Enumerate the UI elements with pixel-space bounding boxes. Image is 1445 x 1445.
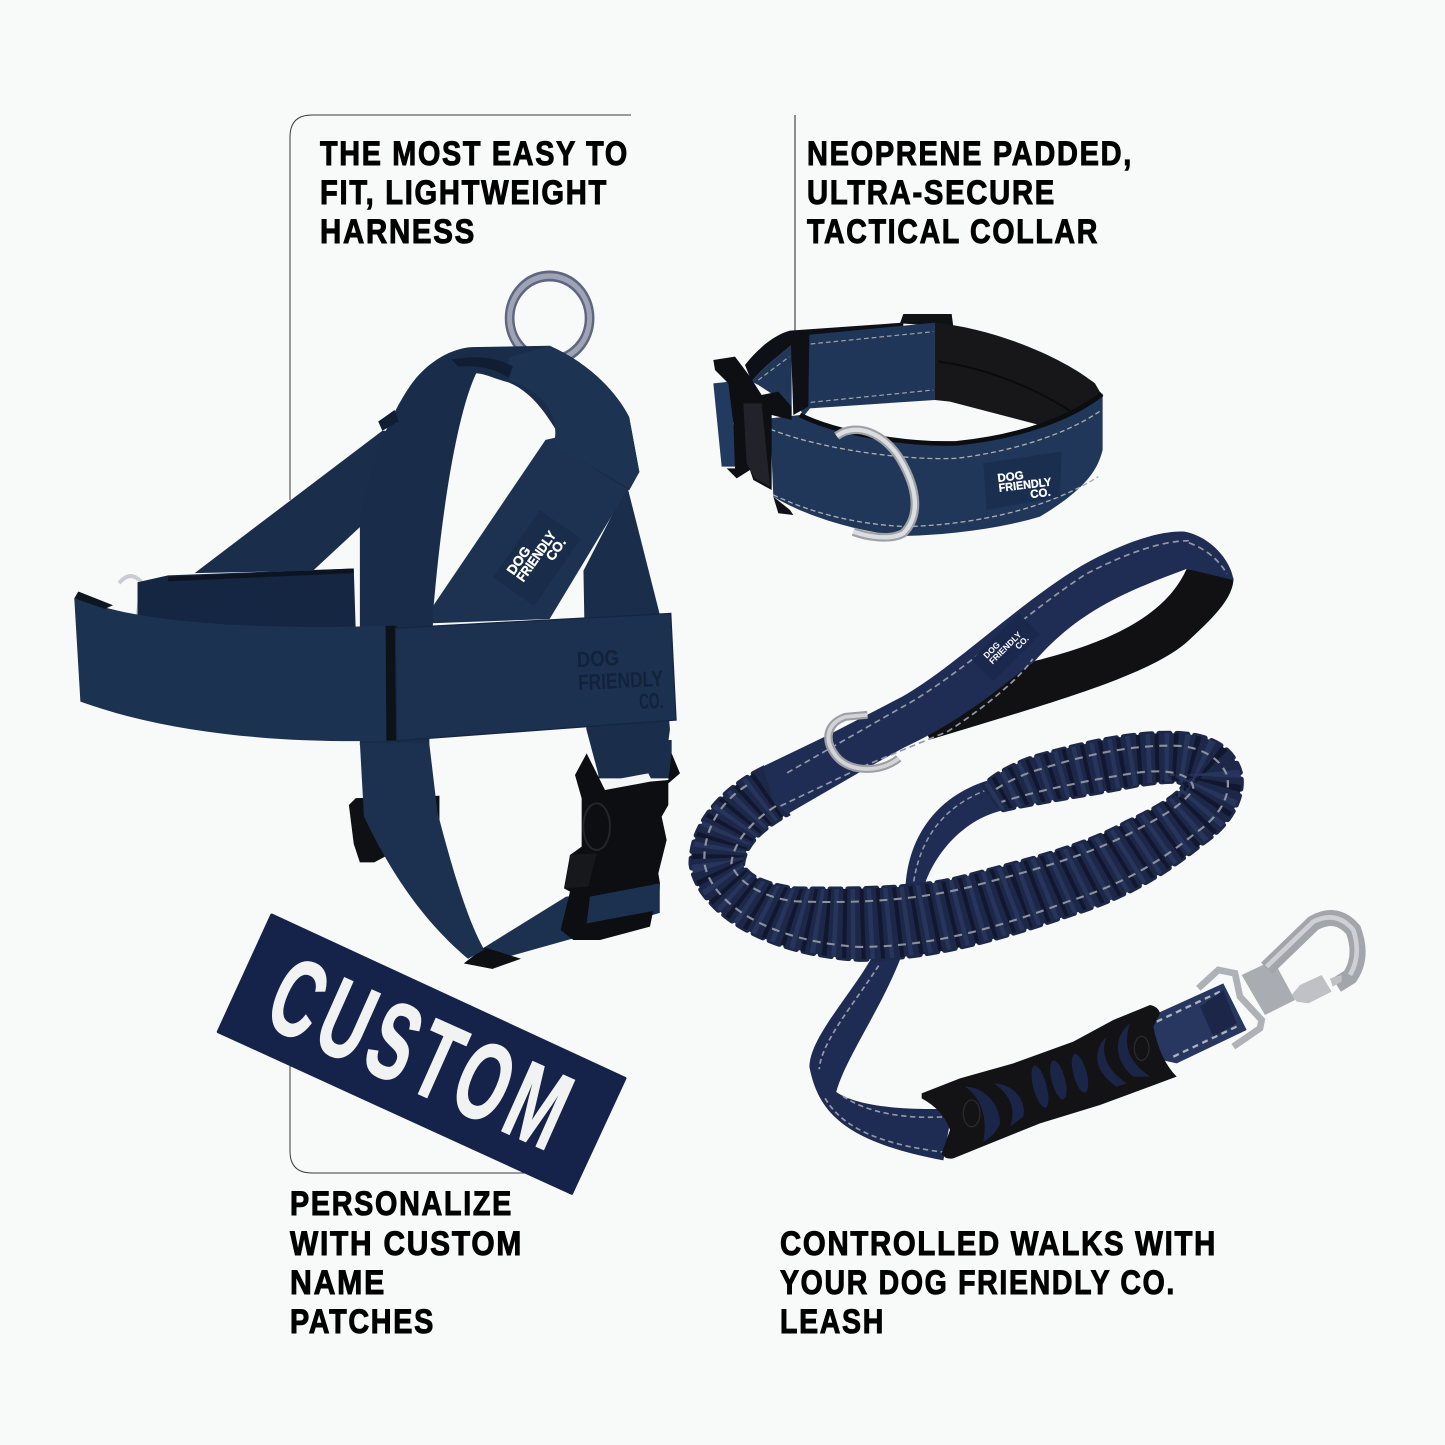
heading: patches: WITH CUSTOM: [290, 1225, 523, 1263]
heading: leash: LEASH: [780, 1303, 885, 1341]
leash handle label: DOG: [981, 639, 1002, 660]
diagonal strap label: CO.: [543, 535, 569, 563]
leather logo: [576, 643, 665, 717]
heading: collar: NEOPRENE PADDED,: [807, 135, 1133, 173]
heading: collar: ULTRA-SECURE: [807, 174, 1056, 212]
diagonal strap label: DOG: [504, 544, 534, 577]
flat leash strap, upper: [905, 779, 1004, 889]
heading: patches: [290, 1185, 523, 1341]
leather patch: [395, 613, 676, 741]
diagonal strap: [421, 435, 631, 624]
icon: collar buckle: [713, 357, 792, 490]
heading: patches: PERSONALIZE: [290, 1185, 513, 1223]
heading: patches: NAME: [290, 1264, 386, 1302]
icon: swivel snap hook: [1147, 917, 1358, 1063]
icon: collar D-ring: [837, 430, 915, 537]
heading: harness: FIT, LIGHTWEIGHT: [320, 174, 608, 212]
collar illustration: [713, 314, 1103, 537]
leash handle label: CO.: [1013, 634, 1031, 651]
diagonal strap label: FRIENDLY: [514, 528, 559, 584]
leather logo: CO.: [638, 688, 664, 714]
neck arch strap: [360, 346, 639, 745]
leather logo: DOG: [576, 645, 619, 672]
heading: leash: [780, 1225, 1217, 1341]
leash handle strap: [763, 532, 1234, 814]
harness illustration: [74, 276, 680, 969]
leash end strap: [1147, 983, 1247, 1063]
snap hook arc: [1267, 917, 1358, 985]
icon: leash D-ring: [828, 715, 899, 769]
patch lettering: CUSTOM: [251, 933, 594, 1176]
waist band front: [74, 591, 397, 741]
leather logo: FRIENDLY: [577, 666, 664, 695]
collar label text: DOG: [997, 470, 1024, 485]
inner waist band: [119, 568, 356, 633]
heading: harness: [320, 135, 629, 251]
snap body: [1242, 960, 1295, 1015]
bungee section: [691, 733, 1241, 959]
swivel ring: [1198, 970, 1262, 1047]
collar front band: [770, 393, 1103, 536]
leash illustration: [691, 532, 1358, 1160]
snap gate: [1292, 975, 1342, 1003]
flat leash strap, lower: [809, 957, 952, 1160]
heading: collar: TACTICAL COLLAR: [807, 213, 1099, 251]
collar label patch: [983, 452, 1062, 510]
leash handle label: FRIENDLY: [987, 629, 1024, 666]
heading: patches: PATCHES: [290, 1303, 435, 1341]
infographic canvas: [74, 114, 1366, 1334]
right chest strap: [583, 486, 670, 775]
collar neoprene lining: [900, 314, 1103, 426]
heading: collar: [807, 135, 1133, 251]
collar label text: FRIENDLY: [998, 476, 1052, 495]
heading: leash: CONTROLLED WALKS WITH: [780, 1225, 1217, 1263]
shoulder strap: [195, 431, 407, 573]
collar label text: CO.: [1030, 487, 1051, 501]
leash handle label: [972, 613, 1040, 681]
collar label text: [997, 467, 1054, 505]
lower strap and slider: [349, 743, 660, 969]
heading: harness: THE MOST EASY TO: [320, 135, 629, 173]
rubber grip: [922, 1005, 1177, 1159]
icon: side release buckle: [561, 740, 680, 940]
collar rear webbing: [745, 323, 935, 417]
icon: harness D-ring: [510, 276, 590, 360]
diagonal strap label: [493, 510, 581, 606]
leash handle lining: [921, 569, 1234, 740]
heading: harness: HARNESS: [320, 213, 476, 251]
custom name patch: [218, 915, 625, 1193]
heading: leash: YOUR DOG FRIENDLY CO.: [780, 1264, 1176, 1302]
